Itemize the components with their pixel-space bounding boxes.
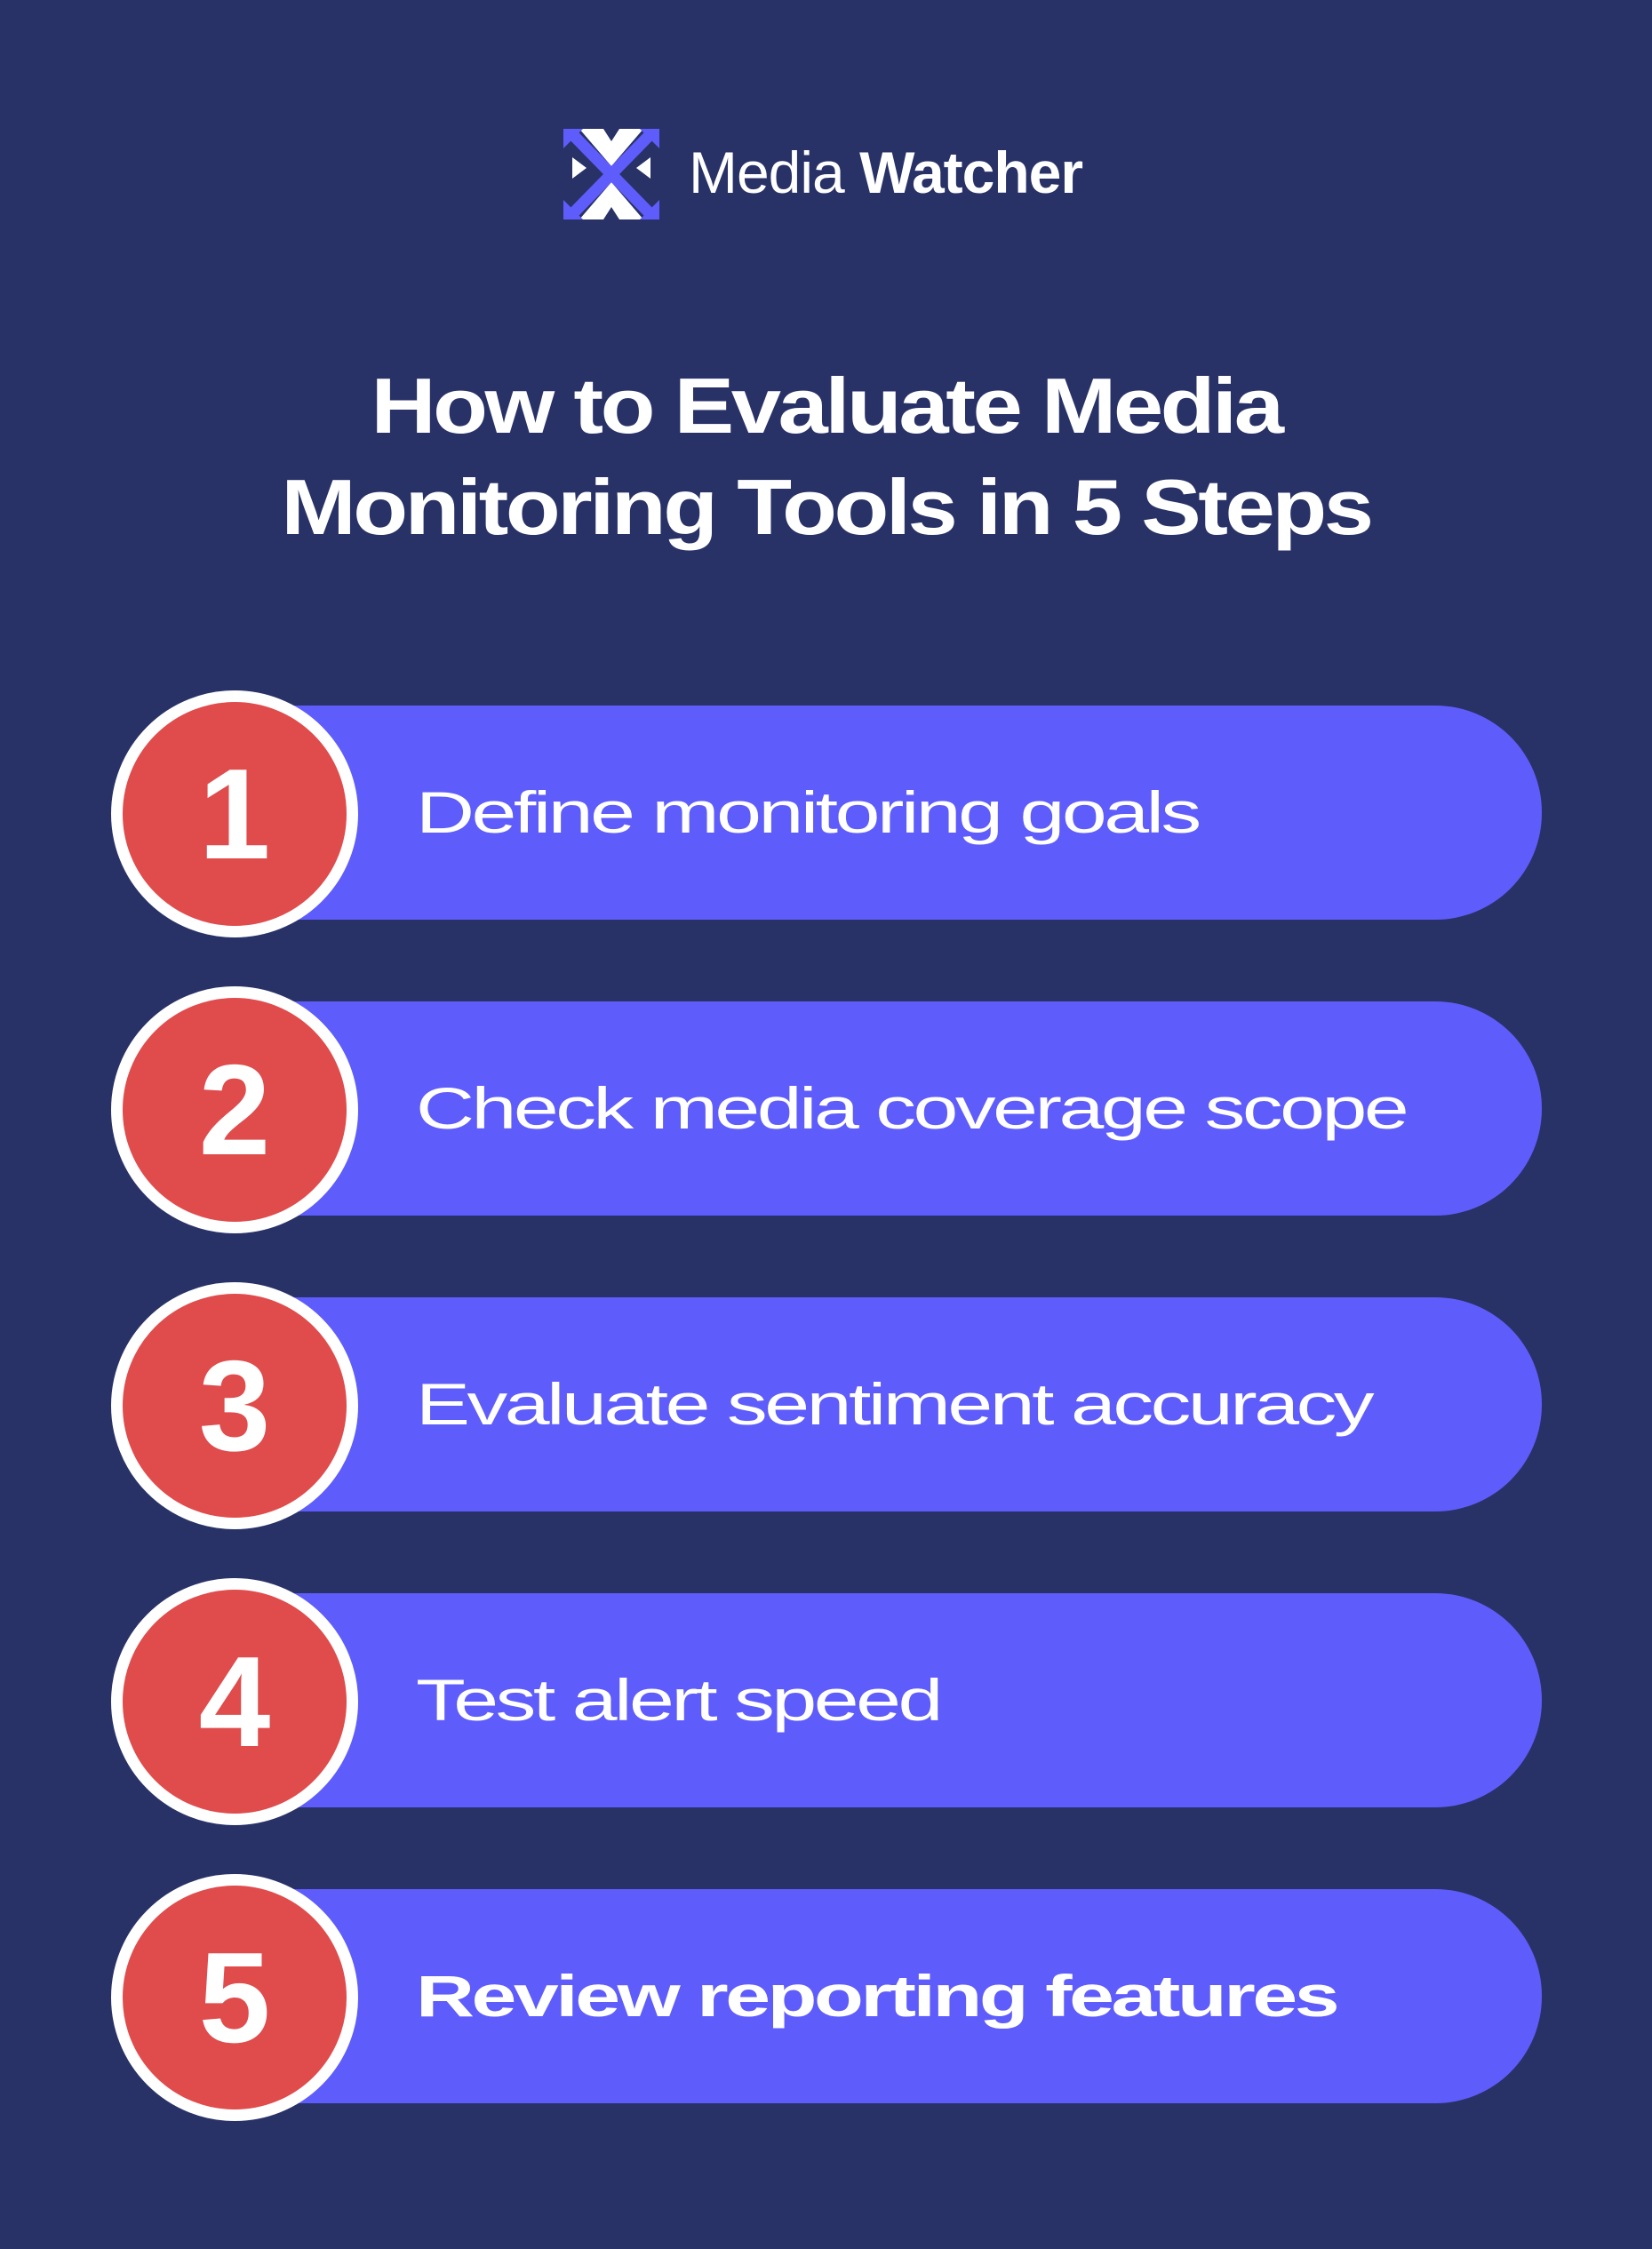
number badge 3: 3 [199,1334,270,1478]
number badge 1 [111,690,358,937]
number badge 4: 4 [199,1630,270,1774]
pill: step 2 [267,1001,1542,1216]
logo [563,129,1082,219]
icon: logo mark [563,129,659,219]
title [281,362,1371,551]
number badge 2 [111,986,358,1233]
pill: step 1: Define monitoring goals [416,779,1199,845]
number badge 1: 1 [199,742,270,886]
step 1 [111,690,1542,937]
step 5 [111,1874,1542,2121]
pill: step 1 [267,706,1542,920]
pill: step 5 [267,1889,1542,2103]
pill: step 4: Test alert speed [416,1667,940,1733]
number badge 2: 2 [199,1038,270,1182]
number badge 4 [111,1578,358,1825]
number badge 3 [111,1282,358,1529]
pill: step 2: Check media coverage scope [416,1075,1406,1141]
pill: step 4 [267,1593,1542,1807]
brand name: Media Watcher [689,140,1082,205]
pill: step 3 [267,1297,1542,1511]
step 2 [111,986,1542,1233]
step 3 [111,1282,1542,1529]
number badge 5 [111,1874,358,2121]
pill: step 3: Evaluate sentiment accuracy [416,1371,1371,1437]
step 4 [111,1578,1542,1825]
pill: step 5: Review reporting features [416,1963,1337,2029]
number badge 5: 5 [199,1926,270,2070]
title: How to Evaluate Media [371,362,1281,450]
title: Monitoring Tools in 5 Steps [281,463,1371,551]
